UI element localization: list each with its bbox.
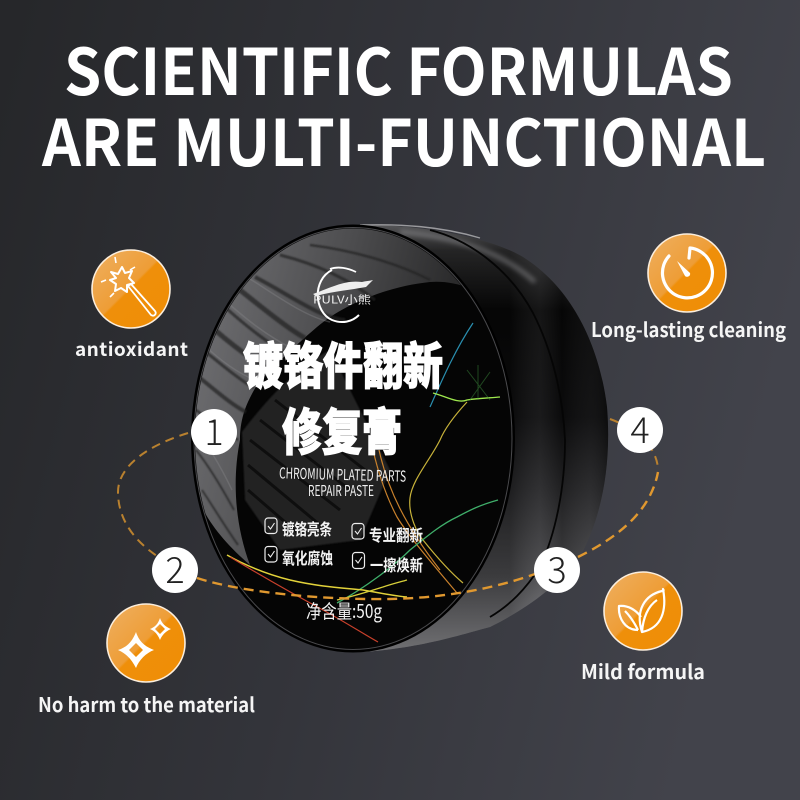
Chinese product name: 修复膏	[282, 393, 402, 465]
feature checklist: 一擦焕新	[370, 552, 423, 576]
Chinese product name: 镀铬件翻新	[243, 327, 443, 399]
marker 1: 1	[204, 404, 224, 456]
face artwork	[190, 226, 500, 642]
marker 4	[617, 402, 663, 454]
light streaks	[430, 323, 473, 407]
title: SCIENTIFIC FORMULAS	[64, 22, 733, 114]
net weight: 净含量:50g	[306, 597, 382, 624]
marker 2: 2	[165, 542, 185, 594]
marker 4: 4	[630, 402, 650, 454]
English product name	[279, 462, 406, 501]
icon: timer	[648, 234, 726, 312]
dashed orbit front segment	[197, 472, 658, 599]
brand logo	[313, 268, 373, 322]
icon: leaves	[604, 572, 682, 650]
Chinese product name	[243, 327, 443, 465]
title: ARE MULTI-FUNCTIONAL	[41, 93, 766, 185]
icon: sparkles	[107, 604, 185, 682]
title	[41, 22, 766, 185]
brand logo: PULV小熊	[313, 292, 371, 308]
label: no harm to the material: No harm to the material	[38, 689, 255, 718]
icon: magic wand	[92, 250, 170, 328]
marker 1	[191, 404, 237, 456]
dashed orbit back segment	[118, 419, 658, 558]
marker 2	[152, 542, 198, 594]
feature checklist: 镀铬亮条	[282, 516, 332, 540]
marker 3: 3	[547, 542, 567, 594]
label: long-lasting cleaning: Long-lasting cleaning	[591, 314, 786, 343]
English product name: REPAIR PASTE	[308, 480, 374, 501]
English product name: CHROMIUM PLATED PARTS	[279, 462, 406, 487]
marker 3	[534, 542, 580, 594]
feature checklist: 专业翻新	[369, 522, 423, 546]
label: mild formula: Mild formula	[581, 656, 705, 685]
jar body	[357, 225, 608, 652]
jar front face	[191, 224, 515, 652]
feature checklist	[265, 516, 423, 576]
label: antioxidant: antioxidant	[75, 335, 188, 362]
product jar	[190, 224, 608, 652]
feature checklist: 氧化腐蚀	[282, 545, 333, 569]
